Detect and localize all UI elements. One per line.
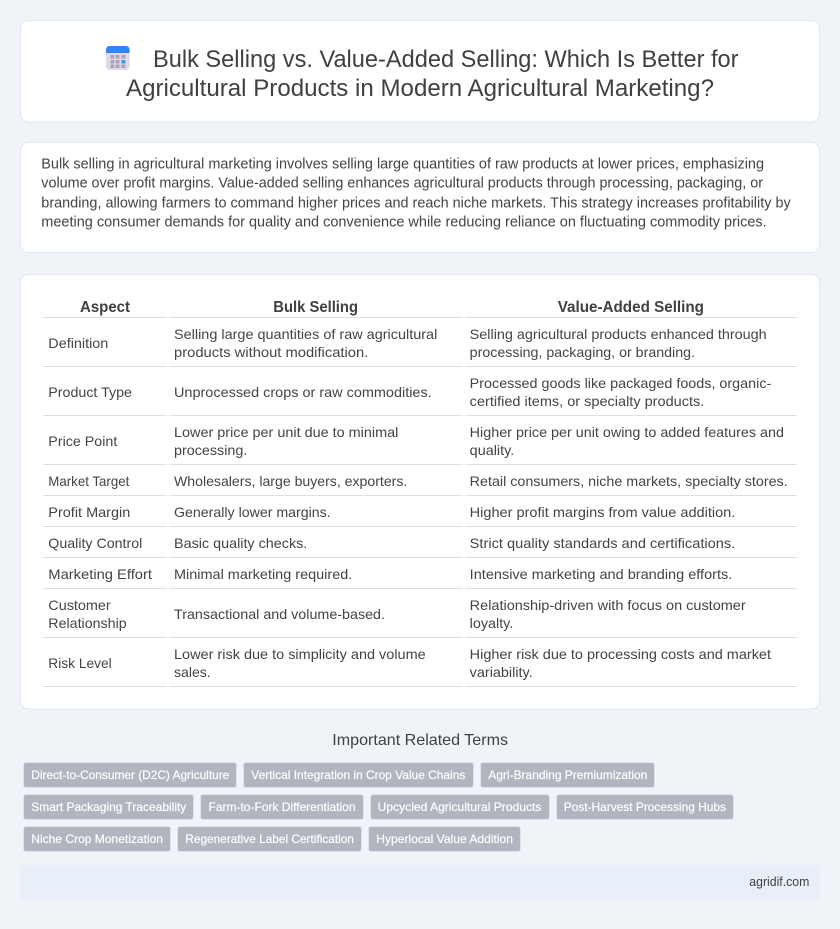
table row: Customer Relationship: Customer xyxy=(48,597,111,613)
tag xyxy=(200,794,364,820)
table row: Customer Relationship: Transactional and volume-based. xyxy=(174,606,385,622)
table header row: Bulk Selling xyxy=(273,299,358,316)
title: Bulk Selling vs. Value-Added Selling: Which Is Better for xyxy=(153,46,739,73)
table row: Product Type: Product Type xyxy=(48,384,132,400)
table row: Price Point: quality. xyxy=(470,442,514,458)
tag xyxy=(370,794,550,820)
panel: related term tags xyxy=(24,762,734,852)
table row: Product Type: certified items, or specialty products. xyxy=(470,393,704,409)
table row: Product Type: Unprocessed crops or raw commodities. xyxy=(174,384,432,400)
table row: Marketing Effort xyxy=(43,566,797,589)
footer bar xyxy=(20,865,820,899)
table row: Profit Margin: Higher profit margins from value addition. xyxy=(470,504,735,520)
table row: Quality Control xyxy=(43,535,797,558)
icon: calendar xyxy=(106,46,130,70)
table row: Product Type xyxy=(43,375,797,416)
table row: Market Target: Retail consumers, niche markets, specialty stores. xyxy=(470,473,788,489)
table row: Definition: Definition xyxy=(48,335,108,351)
panel: comparison table xyxy=(20,274,820,709)
text block: introduction paragraph: volume over profit margins. Value-added selling enhances agricultural products through processing, packaging, or xyxy=(41,176,763,192)
heading: important related terms: Important Related Terms xyxy=(332,732,508,749)
tag xyxy=(244,762,474,788)
tag: Vertical Integration in Crop Value Chains xyxy=(251,768,465,782)
table row: Profit Margin: Profit Margin xyxy=(48,504,130,520)
table row: Risk Level: Risk Level xyxy=(48,655,112,671)
text block: introduction paragraph: Bulk selling in agricultural marketing involves selling large quantities of raw products at lower prices, emphasizing xyxy=(41,156,764,172)
tag xyxy=(24,826,170,852)
tag: Hyperlocal Value Addition xyxy=(376,832,513,846)
tag xyxy=(24,794,194,820)
tag: Upcycled Agricultural Products xyxy=(378,800,541,814)
table row: Definition: Selling agricultural products enhanced through xyxy=(470,326,767,342)
table row: Risk Level: sales. xyxy=(174,664,211,680)
tag: Smart Packaging Traceability xyxy=(31,800,186,814)
table row: Risk Level xyxy=(43,646,797,687)
table row: Profit Margin xyxy=(43,504,797,527)
tag: Niche Crop Monetization xyxy=(31,832,163,846)
table row: Definition: processing, packaging, or branding. xyxy=(470,344,695,360)
table row: Price Point: Lower price per unit due to minimal xyxy=(174,424,398,440)
table row: Customer Relationship xyxy=(43,597,797,638)
table row: Quality Control: Strict quality standards and certifications. xyxy=(470,535,735,551)
table row: Market Target: Wholesalers, large buyers, exporters. xyxy=(174,473,407,489)
tag xyxy=(368,826,520,852)
table row: Definition xyxy=(43,326,797,367)
table row: Profit Margin: Generally lower margins. xyxy=(174,504,331,520)
table row: Price Point xyxy=(43,424,797,465)
tag xyxy=(556,794,734,820)
table row: Definition: products without modification. xyxy=(174,344,368,360)
table row: Marketing Effort: Minimal marketing required. xyxy=(174,566,352,582)
table row: Customer Relationship: Relationship-driven with focus on customer xyxy=(470,597,746,613)
panel: title header xyxy=(20,20,820,122)
text block: introduction paragraph: meeting consumer demands for quality and convenience while reducing reliance on fluctuating commodity prices. xyxy=(41,215,767,231)
tag: Regenerative Label Certification xyxy=(185,832,354,846)
table row: Marketing Effort: Marketing Effort xyxy=(48,566,152,582)
table row: Risk Level: Higher risk due to processing costs and market xyxy=(470,646,771,662)
table row: Customer Relationship: loyalty. xyxy=(470,615,513,631)
table row: Risk Level: Lower risk due to simplicity and volume xyxy=(174,646,426,662)
table row: Quality Control: Quality Control xyxy=(48,535,142,551)
tag: Farm-to-Fork Differentiation xyxy=(208,800,356,814)
table row: Marketing Effort: Intensive marketing and branding efforts. xyxy=(470,566,732,582)
text block: introduction paragraph xyxy=(41,156,791,231)
table row: Price Point: Price Point xyxy=(48,433,117,449)
panel: introduction xyxy=(20,142,820,252)
table row: Risk Level: variability. xyxy=(470,664,533,680)
title xyxy=(126,46,739,102)
table row: Price Point: Higher price per unit owing to added features and xyxy=(470,424,784,440)
table row: Price Point: processing. xyxy=(174,442,247,458)
table row: Quality Control: Basic quality checks. xyxy=(174,535,307,551)
tag xyxy=(480,762,654,788)
text block: introduction paragraph: branding, allowing farmers to command higher prices and reach niche markets. This strategy increases profitability by xyxy=(41,195,791,211)
title: Agricultural Products in Modern Agricultural Marketing? xyxy=(126,75,714,102)
table row: Definition: Selling large quantities of raw agricultural xyxy=(174,326,437,342)
table row: Market Target: Market Target xyxy=(48,473,129,489)
tag: Agri-Branding Premiumization xyxy=(488,768,647,782)
table row: Customer Relationship: Relationship xyxy=(48,615,127,631)
tag: Direct-to-Consumer (D2C) Agriculture xyxy=(31,768,230,782)
footer bar: agridif.com xyxy=(749,875,809,889)
table header row: Aspect xyxy=(80,299,131,316)
tag xyxy=(24,762,236,788)
tag: Post-Harvest Processing Hubs xyxy=(564,800,726,814)
tag xyxy=(178,826,362,852)
table row: Product Type: Processed goods like packaged foods, organic- xyxy=(470,375,772,391)
table header row xyxy=(43,299,797,318)
table row: Market Target xyxy=(43,473,797,496)
table header row: Value-Added Selling xyxy=(558,299,704,316)
